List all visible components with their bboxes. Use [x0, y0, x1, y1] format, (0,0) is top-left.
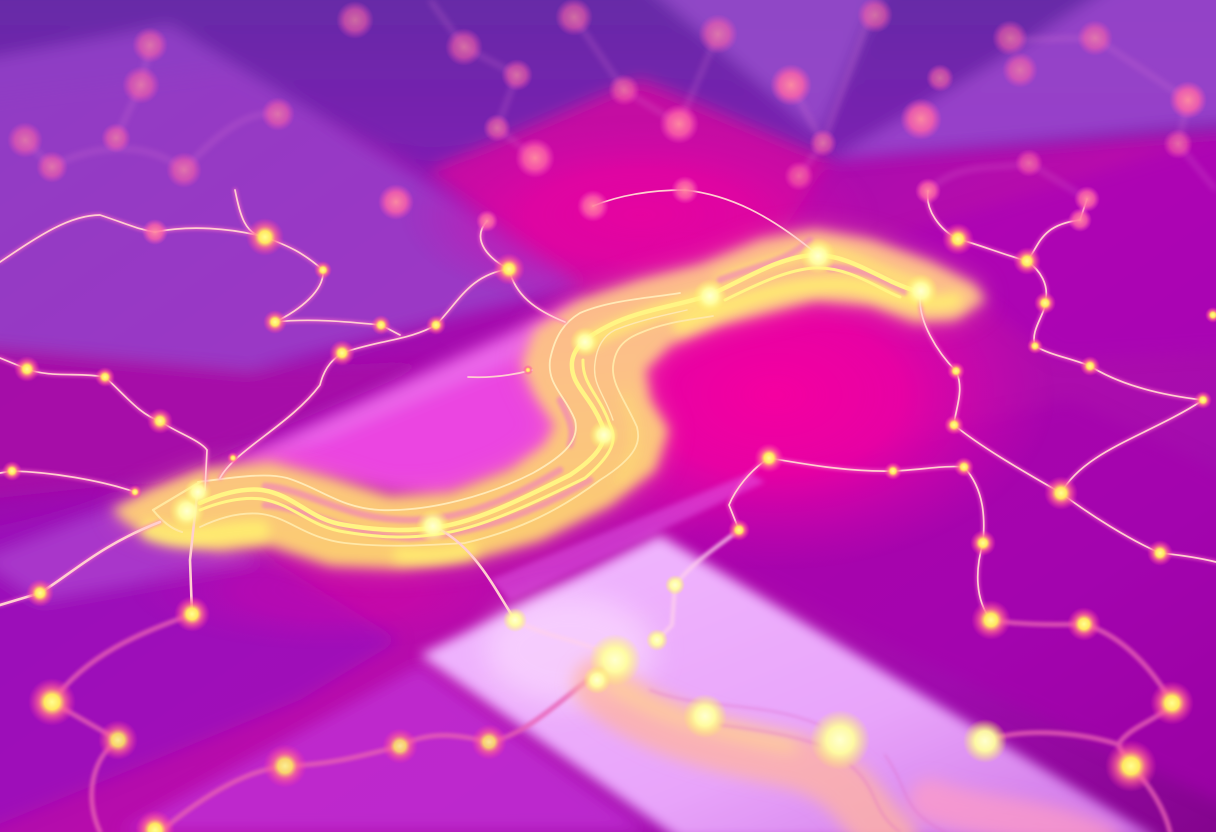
small sharp nodes — [2, 218, 1216, 607]
bright core nodes on band — [169, 238, 938, 543]
thin network lines — [0, 190, 1216, 620]
soft glow under thin network lines — [0, 190, 1216, 620]
large foreground nodes — [28, 575, 1194, 832]
beam highlight — [485, 595, 655, 705]
magenta hot zones — [130, 115, 1055, 650]
light streak — [490, 473, 765, 600]
lower blurred band — [600, 680, 1100, 832]
pink gaps between band strands — [265, 240, 905, 538]
pale links across the beam — [515, 530, 739, 660]
main glowing band — [112, 230, 985, 568]
yellow underside of band — [150, 250, 955, 556]
strands of lower band — [650, 690, 945, 832]
band body — [112, 230, 985, 568]
far blurred nodes — [7, 0, 1193, 191]
band halo — [112, 230, 985, 568]
faint upper network lines — [25, 0, 1216, 199]
lavender strip and pink interior of the S curve — [225, 300, 580, 500]
lavender beam — [420, 535, 1160, 832]
bundled bright strands — [153, 255, 913, 546]
soft foreground lines — [52, 614, 1172, 832]
mid blurred nodes — [142, 64, 1207, 245]
